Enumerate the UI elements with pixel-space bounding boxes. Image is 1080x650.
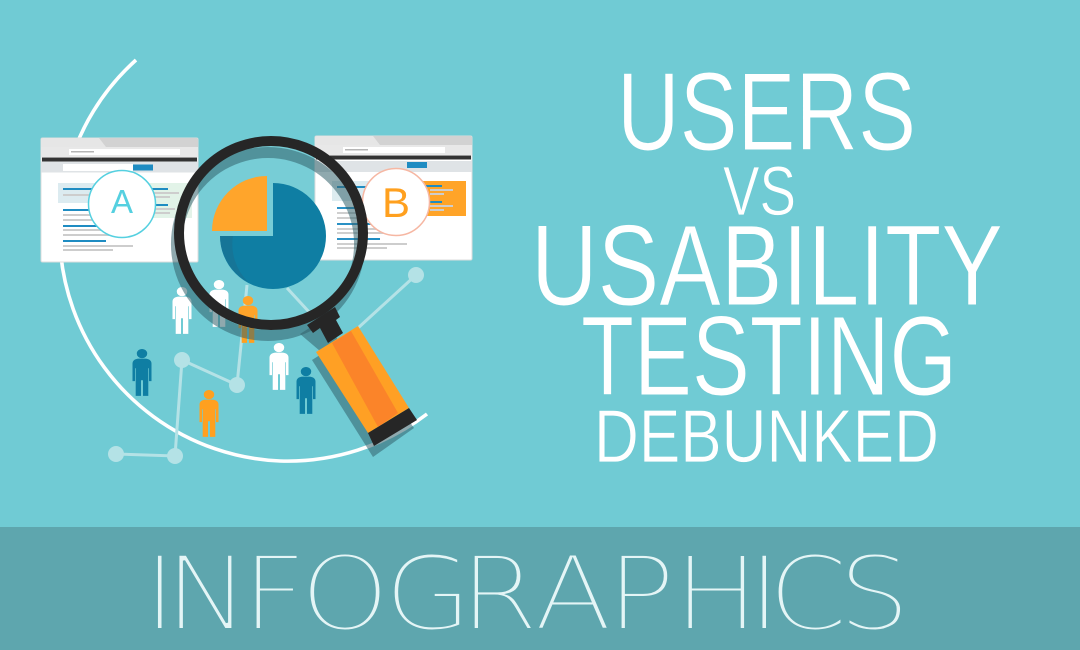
white arc	[60, 60, 427, 461]
magnifier	[179, 141, 417, 446]
magnifier neck	[307, 307, 343, 343]
browser window A	[41, 138, 198, 262]
handle stripe	[332, 331, 398, 427]
pie chart	[212, 176, 326, 289]
pie shading	[220, 236, 248, 282]
pie main segment	[220, 183, 326, 289]
people figures	[132, 280, 316, 437]
handle	[316, 326, 409, 433]
title: DEBUNKED: DEBUNKED	[594, 394, 939, 478]
bottom band	[0, 527, 1080, 650]
browser window B	[315, 136, 472, 260]
person blue 7	[296, 367, 316, 414]
network lines and nodes	[108, 267, 424, 464]
person white 6	[270, 343, 288, 390]
person blue 4	[132, 349, 152, 396]
title: TESTING: TESTING	[581, 293, 957, 419]
person white 2	[210, 280, 228, 327]
person white 1	[172, 287, 192, 334]
lens tint	[183, 145, 359, 321]
magnifier ring	[179, 141, 363, 325]
magnifier shadow	[171, 147, 414, 457]
person orange 5	[200, 390, 218, 437]
pie orange wedge	[212, 176, 267, 231]
person orange 3	[238, 296, 258, 343]
footer: INFOGRAPHICS: INFOGRAPHICS	[143, 534, 910, 650]
title: VS: VS	[723, 152, 796, 230]
letter A: A	[111, 183, 133, 220]
title: USERS: USERS	[617, 50, 916, 174]
handle end cap	[368, 408, 417, 446]
letter B: B	[382, 179, 410, 226]
